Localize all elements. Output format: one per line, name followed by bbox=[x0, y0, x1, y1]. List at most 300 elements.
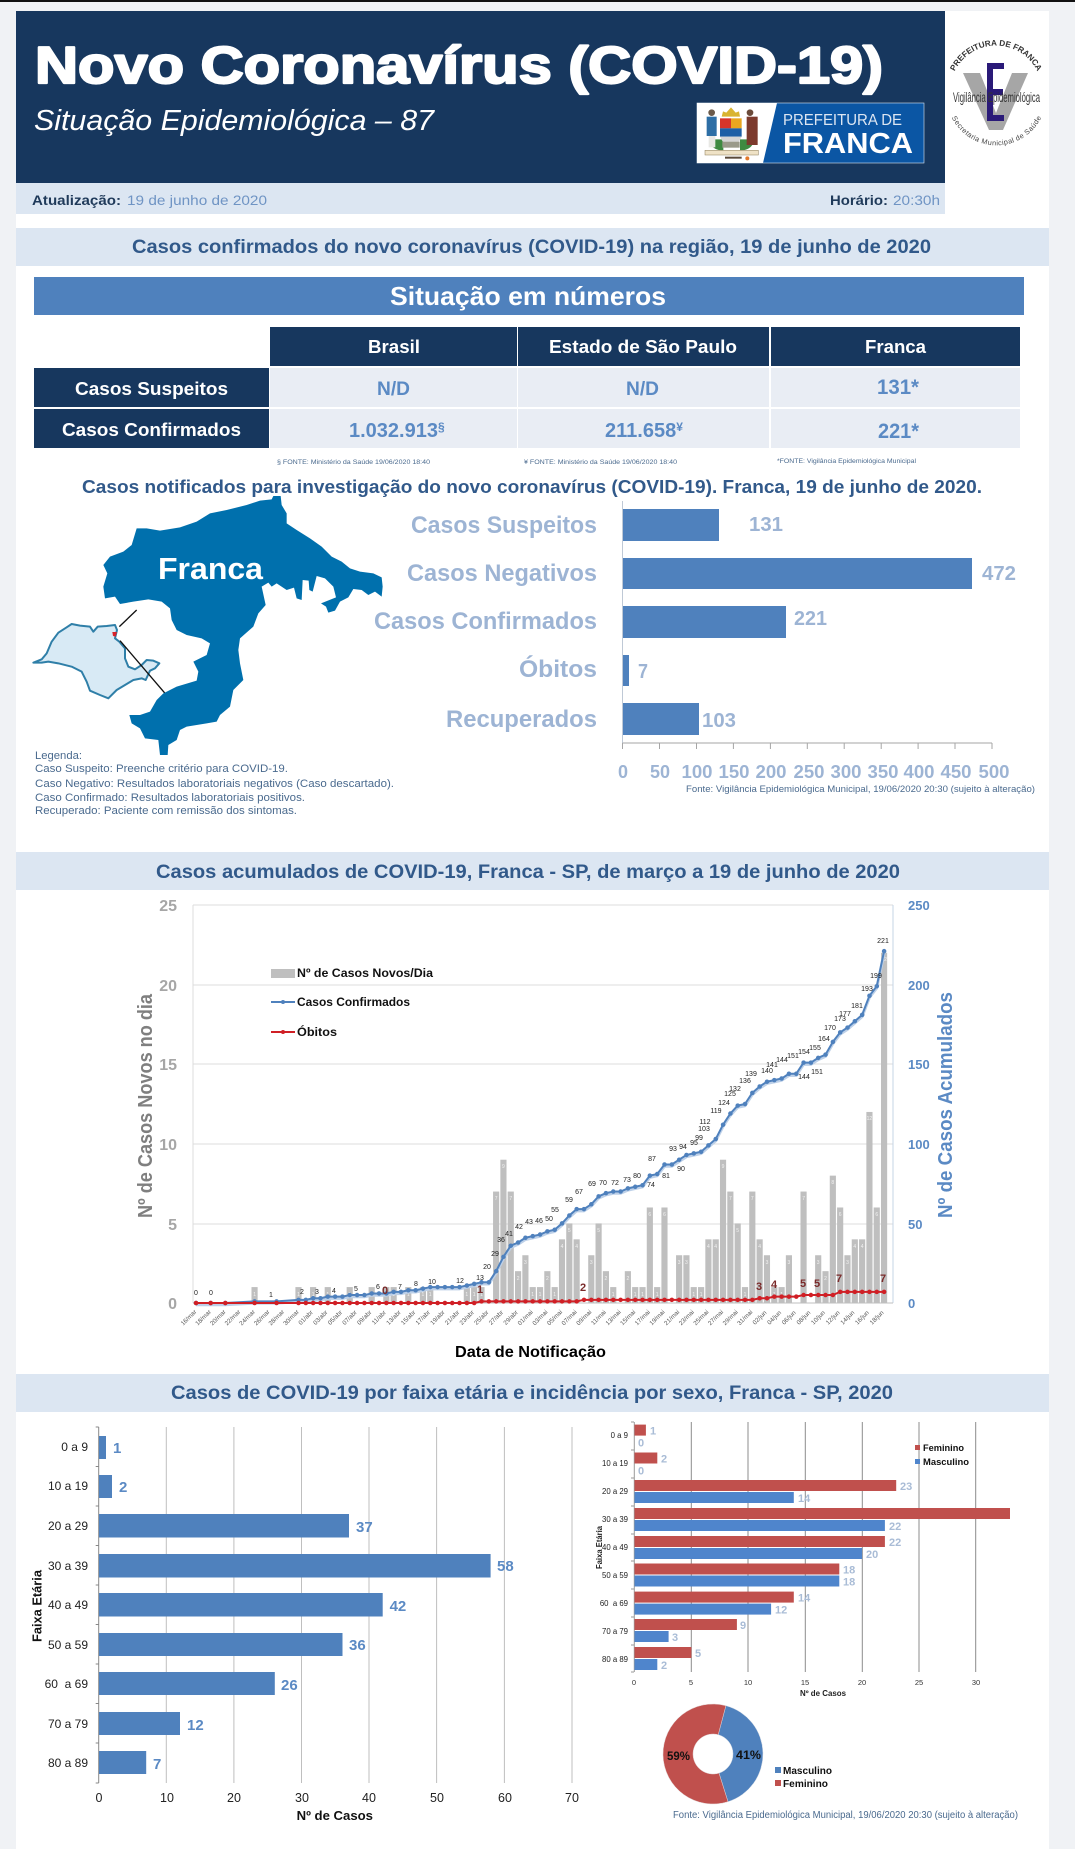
map legend text: Legenda: bbox=[35, 750, 82, 762]
bar value labels: 1 bbox=[392, 1292, 395, 1298]
bar value labels: 1 bbox=[385, 1292, 388, 1298]
sex category labels: 30 a 39 bbox=[602, 1515, 628, 1524]
bar value labels bbox=[253, 957, 887, 1298]
date axis labels: 19/mai bbox=[648, 1309, 666, 1327]
accumulated value labels: 170 bbox=[824, 1025, 836, 1032]
date axis labels: 19/abr bbox=[429, 1309, 447, 1327]
age value labels: 12 bbox=[187, 1717, 204, 1734]
bar value labels: 3 bbox=[590, 1260, 593, 1266]
accumulated value labels: 43 bbox=[525, 1219, 533, 1226]
bar value labels: 3 bbox=[524, 1260, 527, 1266]
accumulated value labels: 2 bbox=[300, 1289, 304, 1296]
header banner bbox=[16, 11, 945, 183]
update date strip: Horário: bbox=[830, 192, 888, 208]
age category labels: 40 a 49 bbox=[48, 1598, 88, 1612]
sex category labels: 80 a 89 bbox=[602, 1655, 628, 1664]
bar value labels: 1 bbox=[407, 1292, 410, 1298]
date axis labels: 18/jun bbox=[869, 1309, 886, 1326]
source note: age and sex: Fonte: Vigilância Epidemiológica Municipal, 19/06/2020 20:30 (sujeito à alteração) bbox=[673, 1810, 1018, 1821]
map legend text: Recuperado: Paciente com remissão dos sintomas. bbox=[35, 805, 297, 817]
table: situation numbers: Casos Suspeitos bbox=[75, 379, 228, 399]
category labels: Casos Suspeitos bbox=[411, 512, 597, 539]
date axis labels: 21/abr bbox=[444, 1309, 461, 1327]
bar chart: cases by age group bbox=[30, 1427, 579, 1823]
accumulated value labels: 132 bbox=[729, 1086, 741, 1093]
accumulated value labels: 164 bbox=[818, 1036, 830, 1043]
value labels: 103 bbox=[702, 710, 736, 732]
sex value labels: 2 bbox=[661, 1660, 667, 1672]
sex y axis title: Faixa Etária bbox=[595, 1525, 604, 1569]
accumulated value labels: 151 bbox=[787, 1053, 799, 1060]
age x axis labels: 70 bbox=[565, 1791, 579, 1805]
age category labels: 60 a 69 bbox=[45, 1677, 88, 1691]
donut chart: sex distribution bbox=[663, 1704, 832, 1804]
sex value labels: 9 bbox=[740, 1620, 746, 1632]
accumulated value labels: 93 bbox=[669, 1146, 677, 1153]
right axis labels: 50 bbox=[908, 1217, 922, 1232]
age value labels bbox=[113, 1440, 514, 1773]
value labels bbox=[638, 514, 1016, 732]
bar value labels: 1 bbox=[700, 1292, 703, 1298]
sex category labels: 40 a 49 bbox=[602, 1543, 628, 1552]
sex value labels: 0 bbox=[638, 1466, 644, 1478]
bar value labels: 1 bbox=[370, 1292, 373, 1298]
value labels: 221 bbox=[794, 608, 827, 630]
age category labels: 50 a 59 bbox=[48, 1638, 88, 1652]
bar value labels: 3 bbox=[846, 1260, 849, 1266]
age x axis labels bbox=[96, 1791, 579, 1805]
accumulated value labels: 125 bbox=[724, 1091, 736, 1098]
date axis labels: 17/abr bbox=[414, 1309, 432, 1327]
table: situation numbers: Franca bbox=[865, 337, 927, 357]
combo chart: daily and accumulated cases bbox=[135, 898, 957, 1361]
sex value labels: 14 bbox=[798, 1593, 811, 1605]
accumulated value labels: 29 bbox=[491, 1251, 499, 1258]
subtitle: Situação Epidemiológica – 87 bbox=[34, 105, 436, 137]
left axis labels: 20 bbox=[159, 978, 177, 995]
bar value labels: 1 bbox=[656, 1292, 659, 1298]
date axis labels: 17/mai bbox=[634, 1309, 652, 1327]
accumulated value labels bbox=[194, 938, 889, 1299]
map legend text: Caso Suspeito: Preenche critério para COVID-19. bbox=[35, 763, 288, 775]
date axis labels: 09/mai bbox=[575, 1309, 593, 1327]
sex value labels: 12 bbox=[775, 1605, 787, 1617]
accumulated value labels: 67 bbox=[575, 1189, 583, 1196]
donut legend bbox=[775, 1766, 832, 1790]
female bars bbox=[634, 1425, 1010, 1658]
bar value labels: 4 bbox=[707, 1244, 710, 1250]
bar value labels: 2 bbox=[517, 1276, 520, 1282]
logo: Prefeitura de Franca: FRANCA bbox=[783, 128, 913, 160]
right axis labels: 250 bbox=[908, 898, 930, 913]
date axis labels: 22/mar bbox=[224, 1309, 242, 1327]
bar value labels: 3 bbox=[685, 1260, 688, 1266]
chart legend: Óbitos bbox=[297, 1024, 337, 1039]
sex x axis labels: 5 bbox=[689, 1678, 693, 1687]
daily new cases bars bbox=[251, 953, 887, 1303]
donut legend: Feminino bbox=[783, 1779, 828, 1790]
date axis labels: 28/mar bbox=[267, 1309, 286, 1327]
age value labels: 37 bbox=[356, 1519, 373, 1536]
right axis labels bbox=[908, 898, 930, 1311]
accumulated value labels: 221 bbox=[877, 938, 889, 945]
accumulated value labels: 4 bbox=[332, 1288, 336, 1295]
sex value labels: 23 bbox=[900, 1481, 912, 1493]
source note: Fonte: Vigilância Epidemiológica Municipal, 19/06/2020 20:30 (sujeito à alteração) bbox=[686, 784, 1035, 795]
sex category labels: 60 a 69 bbox=[600, 1599, 628, 1608]
bar value labels: 6 bbox=[648, 1212, 651, 1218]
date axis labels: 07/mai bbox=[560, 1309, 579, 1327]
deaths value labels: 7 bbox=[880, 1273, 886, 1285]
right axis labels: 0 bbox=[908, 1296, 915, 1311]
date axis labels: 03/abr bbox=[312, 1309, 329, 1327]
accumulated value labels: 173 bbox=[834, 1016, 846, 1023]
table: situation numbers: 221* bbox=[878, 420, 920, 443]
sex value labels: 22 bbox=[889, 1521, 901, 1533]
accumulated value labels: 74 bbox=[647, 1182, 655, 1189]
sex value labels: 18 bbox=[843, 1564, 855, 1576]
age value labels: 58 bbox=[497, 1558, 514, 1575]
left axis title: Nº de Casos Novos no dia bbox=[135, 993, 157, 1218]
bar value labels: 1 bbox=[531, 1292, 534, 1298]
bar value labels: 3 bbox=[766, 1260, 769, 1266]
deaths value labels: 1 bbox=[477, 1284, 483, 1296]
table footnotes: § FONTE: Ministério da Saúde 19/06/2020 18:40 bbox=[277, 459, 430, 466]
table: situation numbers: 211.658 bbox=[605, 420, 676, 442]
age value labels: 7 bbox=[153, 1756, 161, 1773]
table: situation numbers: 1.032.913 bbox=[349, 420, 438, 442]
date axis labels: 27/mai bbox=[707, 1309, 725, 1327]
date axis labels: 29/abr bbox=[502, 1309, 520, 1327]
right axis labels: 200 bbox=[908, 978, 930, 993]
accumulated value labels: 99 bbox=[695, 1135, 703, 1142]
date axis labels: 07/abr bbox=[341, 1309, 359, 1327]
accumulated value labels: 0 bbox=[194, 1290, 198, 1297]
accumulated value labels: 199 bbox=[870, 973, 882, 980]
bar value labels: 6 bbox=[663, 1212, 666, 1218]
sex value labels: 14 bbox=[798, 1493, 811, 1505]
date axis labels: 18/mar bbox=[194, 1309, 213, 1327]
title: Novo Coronavírus (COVID-19) bbox=[35, 37, 883, 95]
accumulated value labels: 41 bbox=[505, 1231, 513, 1238]
accumulated cases line bbox=[196, 951, 884, 1305]
accumulated value labels: 95 bbox=[690, 1140, 698, 1147]
accumulated value labels: 124 bbox=[718, 1100, 730, 1107]
age value labels: 26 bbox=[281, 1677, 298, 1694]
sex value labels: 2 bbox=[661, 1454, 667, 1466]
bar value labels: 9 bbox=[502, 1164, 505, 1170]
deaths value labels: 5 bbox=[814, 1278, 820, 1290]
date axis labels: 27/abr bbox=[488, 1309, 505, 1327]
age category labels: 30 a 39 bbox=[48, 1559, 88, 1573]
date axis labels: 13/mai bbox=[604, 1309, 623, 1327]
age x axis title: Nº de Casos bbox=[297, 1808, 373, 1823]
update date strip bbox=[16, 183, 945, 214]
map legend text: Caso Confirmado: Resultados laboratoriais positivos. bbox=[35, 792, 305, 804]
accumulated value labels: 73 bbox=[623, 1177, 631, 1184]
bar chart: cases by sex and age bbox=[595, 1422, 1010, 1698]
map: São Paulo state inset bbox=[33, 610, 165, 698]
sex category labels: 0 a 9 bbox=[611, 1431, 628, 1440]
left axis labels: 15 bbox=[159, 1057, 177, 1074]
accumulated value labels: 20 bbox=[483, 1264, 491, 1271]
date axis labels: 16/jun bbox=[854, 1309, 871, 1326]
deaths line bbox=[196, 1292, 884, 1303]
table footnotes bbox=[277, 458, 917, 466]
sex value labels: 20 bbox=[866, 1549, 878, 1561]
bar value labels: 1 bbox=[348, 1292, 351, 1298]
date axis labels: 13/abr bbox=[385, 1309, 403, 1327]
bar value labels: 8 bbox=[831, 1180, 834, 1186]
logo crest bbox=[705, 107, 758, 160]
accumulated value labels: 119 bbox=[710, 1108, 722, 1115]
bar value labels: 4 bbox=[861, 1244, 864, 1250]
bar value labels: 1 bbox=[634, 1292, 637, 1298]
accumulated value labels: 90 bbox=[677, 1166, 685, 1173]
bar value labels: 12 bbox=[867, 1116, 872, 1122]
update date strip: Atualização: bbox=[32, 192, 121, 208]
sex x axis labels bbox=[632, 1678, 980, 1687]
accumulated value labels: 144 bbox=[798, 1074, 810, 1081]
sex value labels: 18 bbox=[843, 1576, 855, 1588]
bar value labels: 1 bbox=[641, 1292, 644, 1298]
bar value labels: 1 bbox=[326, 1292, 329, 1298]
bar value labels: 1 bbox=[253, 1292, 256, 1298]
age value labels: 42 bbox=[390, 1598, 406, 1615]
date axis labels: 05/mai bbox=[546, 1309, 564, 1327]
accumulated value labels: 80 bbox=[633, 1173, 641, 1180]
accumulated value labels: 81 bbox=[662, 1173, 670, 1180]
bar value labels: 1 bbox=[744, 1292, 747, 1298]
date axis labels: 11/abr bbox=[371, 1309, 388, 1326]
age y axis title: Faixa Etária bbox=[30, 1569, 44, 1642]
section heading: accumulated cases: Casos acumulados de COVID-19, Franca - SP, de março a 19 de junho de 2020 bbox=[156, 862, 900, 883]
category labels bbox=[374, 512, 597, 733]
sex chart legend: Masculino bbox=[923, 1457, 969, 1468]
table: situation numbers: N/D bbox=[626, 379, 659, 400]
date axis labels: 01/mai bbox=[517, 1309, 535, 1327]
date axis labels: 11/mai bbox=[590, 1309, 608, 1327]
accumulated value labels: 42 bbox=[515, 1224, 523, 1231]
date axis labels: 24/mar bbox=[238, 1309, 257, 1327]
accumulated value labels: 154 bbox=[798, 1049, 810, 1056]
sex chart legend: Feminino bbox=[923, 1443, 964, 1454]
age x axis labels: 60 bbox=[498, 1791, 512, 1805]
table: situation numbers bbox=[34, 327, 1020, 448]
date axis labels: 03/mai bbox=[531, 1309, 549, 1327]
bar value labels: 1 bbox=[429, 1292, 432, 1298]
section heading: age and sex: Casos de COVID-19 por faixa etária e incidência por sexo, Franca - SP, 2020 bbox=[171, 1383, 893, 1404]
accumulated value labels: 1 bbox=[269, 1292, 273, 1299]
sex x axis labels: 10 bbox=[744, 1678, 752, 1687]
deaths value labels: 2 bbox=[580, 1282, 586, 1294]
bar value labels: 7 bbox=[751, 1196, 754, 1202]
left axis labels bbox=[159, 898, 177, 1313]
value labels: 472 bbox=[982, 563, 1016, 585]
sex value labels: 5 bbox=[695, 1648, 701, 1660]
bar value labels: 7 bbox=[802, 1196, 805, 1202]
date axis labels: 12/jun bbox=[825, 1309, 842, 1326]
left axis labels: 10 bbox=[159, 1137, 177, 1154]
accumulated value labels: 10 bbox=[428, 1279, 436, 1286]
date axis labels: 04/jun bbox=[766, 1309, 783, 1326]
accumulated value labels: 139 bbox=[745, 1071, 757, 1078]
map legend text: Caso Negativo: Resultados laboratoriais negativos (Caso descartado). bbox=[35, 778, 394, 790]
donut legend: Masculino bbox=[783, 1766, 832, 1777]
age category labels: 20 a 29 bbox=[48, 1519, 88, 1533]
sex category labels: 10 a 19 bbox=[602, 1459, 628, 1468]
bar value labels: 1 bbox=[297, 1292, 300, 1298]
deaths value labels: 4 bbox=[771, 1279, 778, 1291]
heading band: Situação em números: Situação em números bbox=[390, 281, 666, 311]
donut chart: sex distribution: 41% bbox=[736, 1748, 761, 1762]
deaths value labels: 5 bbox=[800, 1278, 806, 1290]
age bars bbox=[99, 1436, 491, 1774]
sex value labels: 1 bbox=[650, 1426, 656, 1438]
section heading: accumulated cases bbox=[16, 852, 1049, 890]
date axis labels bbox=[180, 1309, 886, 1327]
bar value labels: 7 bbox=[495, 1196, 498, 1202]
table footnotes: *FONTE: Vigilância Epidemiológica Municipal bbox=[777, 458, 917, 465]
date axis labels: 10/jun bbox=[810, 1309, 827, 1326]
logo text: PREFEITURA DE bbox=[783, 112, 902, 129]
table: situation numbers: ¥ bbox=[676, 420, 683, 434]
bar value labels: 1 bbox=[465, 1292, 468, 1298]
bar value labels: 3 bbox=[817, 1260, 820, 1266]
x axis: 300 bbox=[830, 762, 862, 782]
date axis labels: 23/mai bbox=[678, 1309, 696, 1327]
section heading: age and sex bbox=[16, 1374, 1049, 1412]
accumulated value labels: 70 bbox=[599, 1180, 607, 1187]
age x axis labels: 20 bbox=[227, 1791, 241, 1805]
date axis labels: 21/mai bbox=[663, 1309, 681, 1327]
age x axis labels: 0 bbox=[96, 1791, 103, 1805]
accumulated value labels: 36 bbox=[497, 1237, 505, 1244]
x axis: 0 bbox=[618, 762, 628, 782]
age value labels: 2 bbox=[119, 1479, 127, 1496]
deaths value labels bbox=[382, 1273, 886, 1297]
sex category labels bbox=[600, 1431, 628, 1664]
table footnotes: ¥ FONTE: Ministério da Saúde 19/06/2020 18:40 bbox=[524, 459, 677, 466]
age x axis labels: 10 bbox=[160, 1791, 174, 1805]
bar value labels: 4 bbox=[714, 1244, 717, 1250]
date axis labels: 16/mar bbox=[180, 1309, 198, 1327]
bar value labels: 2 bbox=[605, 1276, 608, 1282]
bar value labels: 1 bbox=[422, 1292, 425, 1298]
x axis: 200 bbox=[756, 762, 786, 782]
map legend text bbox=[35, 750, 394, 817]
date axis labels: 23/abr bbox=[458, 1309, 476, 1327]
x axis: 100 bbox=[682, 762, 712, 782]
date axis labels: 01/abr bbox=[297, 1309, 315, 1327]
age value labels: 1 bbox=[113, 1440, 121, 1457]
bar value labels: 5 bbox=[568, 1228, 571, 1234]
value labels: 7 bbox=[638, 661, 648, 683]
accumulated value labels: 69 bbox=[588, 1181, 596, 1188]
table: situation numbers: Brasil bbox=[368, 337, 420, 357]
table: situation numbers: N/D bbox=[377, 379, 410, 400]
accumulated value labels: 6 bbox=[376, 1284, 380, 1291]
accumulated value labels: 0 bbox=[209, 1290, 213, 1297]
sex x axis labels: 15 bbox=[801, 1678, 809, 1687]
accumulated value labels: 46 bbox=[535, 1218, 543, 1225]
map: Franca municipality: Franca bbox=[158, 551, 264, 586]
date axis labels: 02/jun bbox=[752, 1309, 769, 1326]
sex x axis labels: 20 bbox=[858, 1678, 866, 1687]
accumulated value labels: 12 bbox=[456, 1278, 464, 1285]
x axis title: Data de Notificação bbox=[455, 1344, 606, 1361]
category labels: Casos Confirmados bbox=[374, 608, 597, 635]
date axis labels: 31/mai bbox=[736, 1309, 754, 1327]
category labels: Recuperados bbox=[446, 706, 597, 733]
bar value labels: 6 bbox=[875, 1212, 878, 1218]
deaths value labels: 7 bbox=[836, 1273, 842, 1285]
table: situation numbers: Casos Confirmados bbox=[62, 420, 241, 440]
accumulated value labels: 72 bbox=[611, 1180, 619, 1187]
section heading: region bbox=[16, 228, 1049, 266]
age category labels: 0 a 9 bbox=[61, 1440, 88, 1454]
x axis bbox=[618, 743, 1010, 782]
date axis labels: 30/mar bbox=[282, 1309, 301, 1327]
x axis: 450 bbox=[940, 762, 972, 782]
accumulated value labels: 144 bbox=[776, 1057, 788, 1064]
accumulated value labels: 140 bbox=[761, 1068, 773, 1075]
accumulated value labels: 55 bbox=[551, 1207, 559, 1214]
sex x axis labels: 25 bbox=[915, 1678, 923, 1687]
chart legend bbox=[271, 966, 433, 1039]
x axis: 50 bbox=[650, 762, 670, 782]
bar value labels: 1 bbox=[473, 1292, 476, 1298]
accumulated value labels: 141 bbox=[766, 1062, 778, 1069]
male bars bbox=[634, 1492, 885, 1670]
accumulated value labels: 59 bbox=[565, 1197, 573, 1204]
bar value labels: 1 bbox=[553, 1292, 556, 1298]
accumulated value labels: 8 bbox=[414, 1281, 418, 1288]
sex value labels bbox=[638, 1426, 912, 1672]
date axis labels: 26/mar bbox=[253, 1309, 271, 1327]
bar value labels: 3 bbox=[678, 1260, 681, 1266]
date axis labels: 08/jun bbox=[795, 1309, 813, 1326]
date axis labels: 25/abr bbox=[473, 1309, 490, 1327]
x axis: 250 bbox=[794, 762, 824, 782]
bar value labels: 9 bbox=[722, 1164, 725, 1170]
age x axis labels: 40 bbox=[362, 1791, 376, 1805]
accumulated value labels: 94 bbox=[679, 1144, 687, 1151]
left axis labels: 5 bbox=[168, 1217, 177, 1234]
sex x axis labels: 30 bbox=[972, 1678, 980, 1687]
date axis labels: 25/mai bbox=[692, 1309, 710, 1327]
accumulated value labels: 13 bbox=[476, 1275, 484, 1282]
date axis labels: 06/jun bbox=[781, 1309, 798, 1326]
accumulated value labels: 3 bbox=[315, 1289, 319, 1296]
map: Franca municipality bbox=[103, 496, 383, 755]
logo: Vigilância Epidemiológica bbox=[950, 40, 1042, 146]
chart legend: Casos Confirmados bbox=[297, 995, 410, 1009]
table: situation numbers: § bbox=[438, 420, 445, 434]
bar chart: notified cases bbox=[374, 501, 1035, 795]
age category labels bbox=[45, 1440, 88, 1770]
sex value labels: 0 bbox=[638, 1438, 644, 1450]
bar value labels: 22 bbox=[881, 957, 887, 963]
table: situation numbers: Estado de São Paulo bbox=[549, 337, 737, 357]
date axis labels: 05/abr bbox=[327, 1309, 344, 1327]
x axis: 350 bbox=[868, 762, 898, 782]
deaths value labels: 3 bbox=[756, 1281, 762, 1293]
age category labels: 70 a 79 bbox=[48, 1717, 88, 1731]
accumulated value labels: 177 bbox=[839, 1011, 851, 1018]
bar value labels: 1 bbox=[539, 1292, 542, 1298]
bar value labels: 4 bbox=[575, 1244, 578, 1250]
